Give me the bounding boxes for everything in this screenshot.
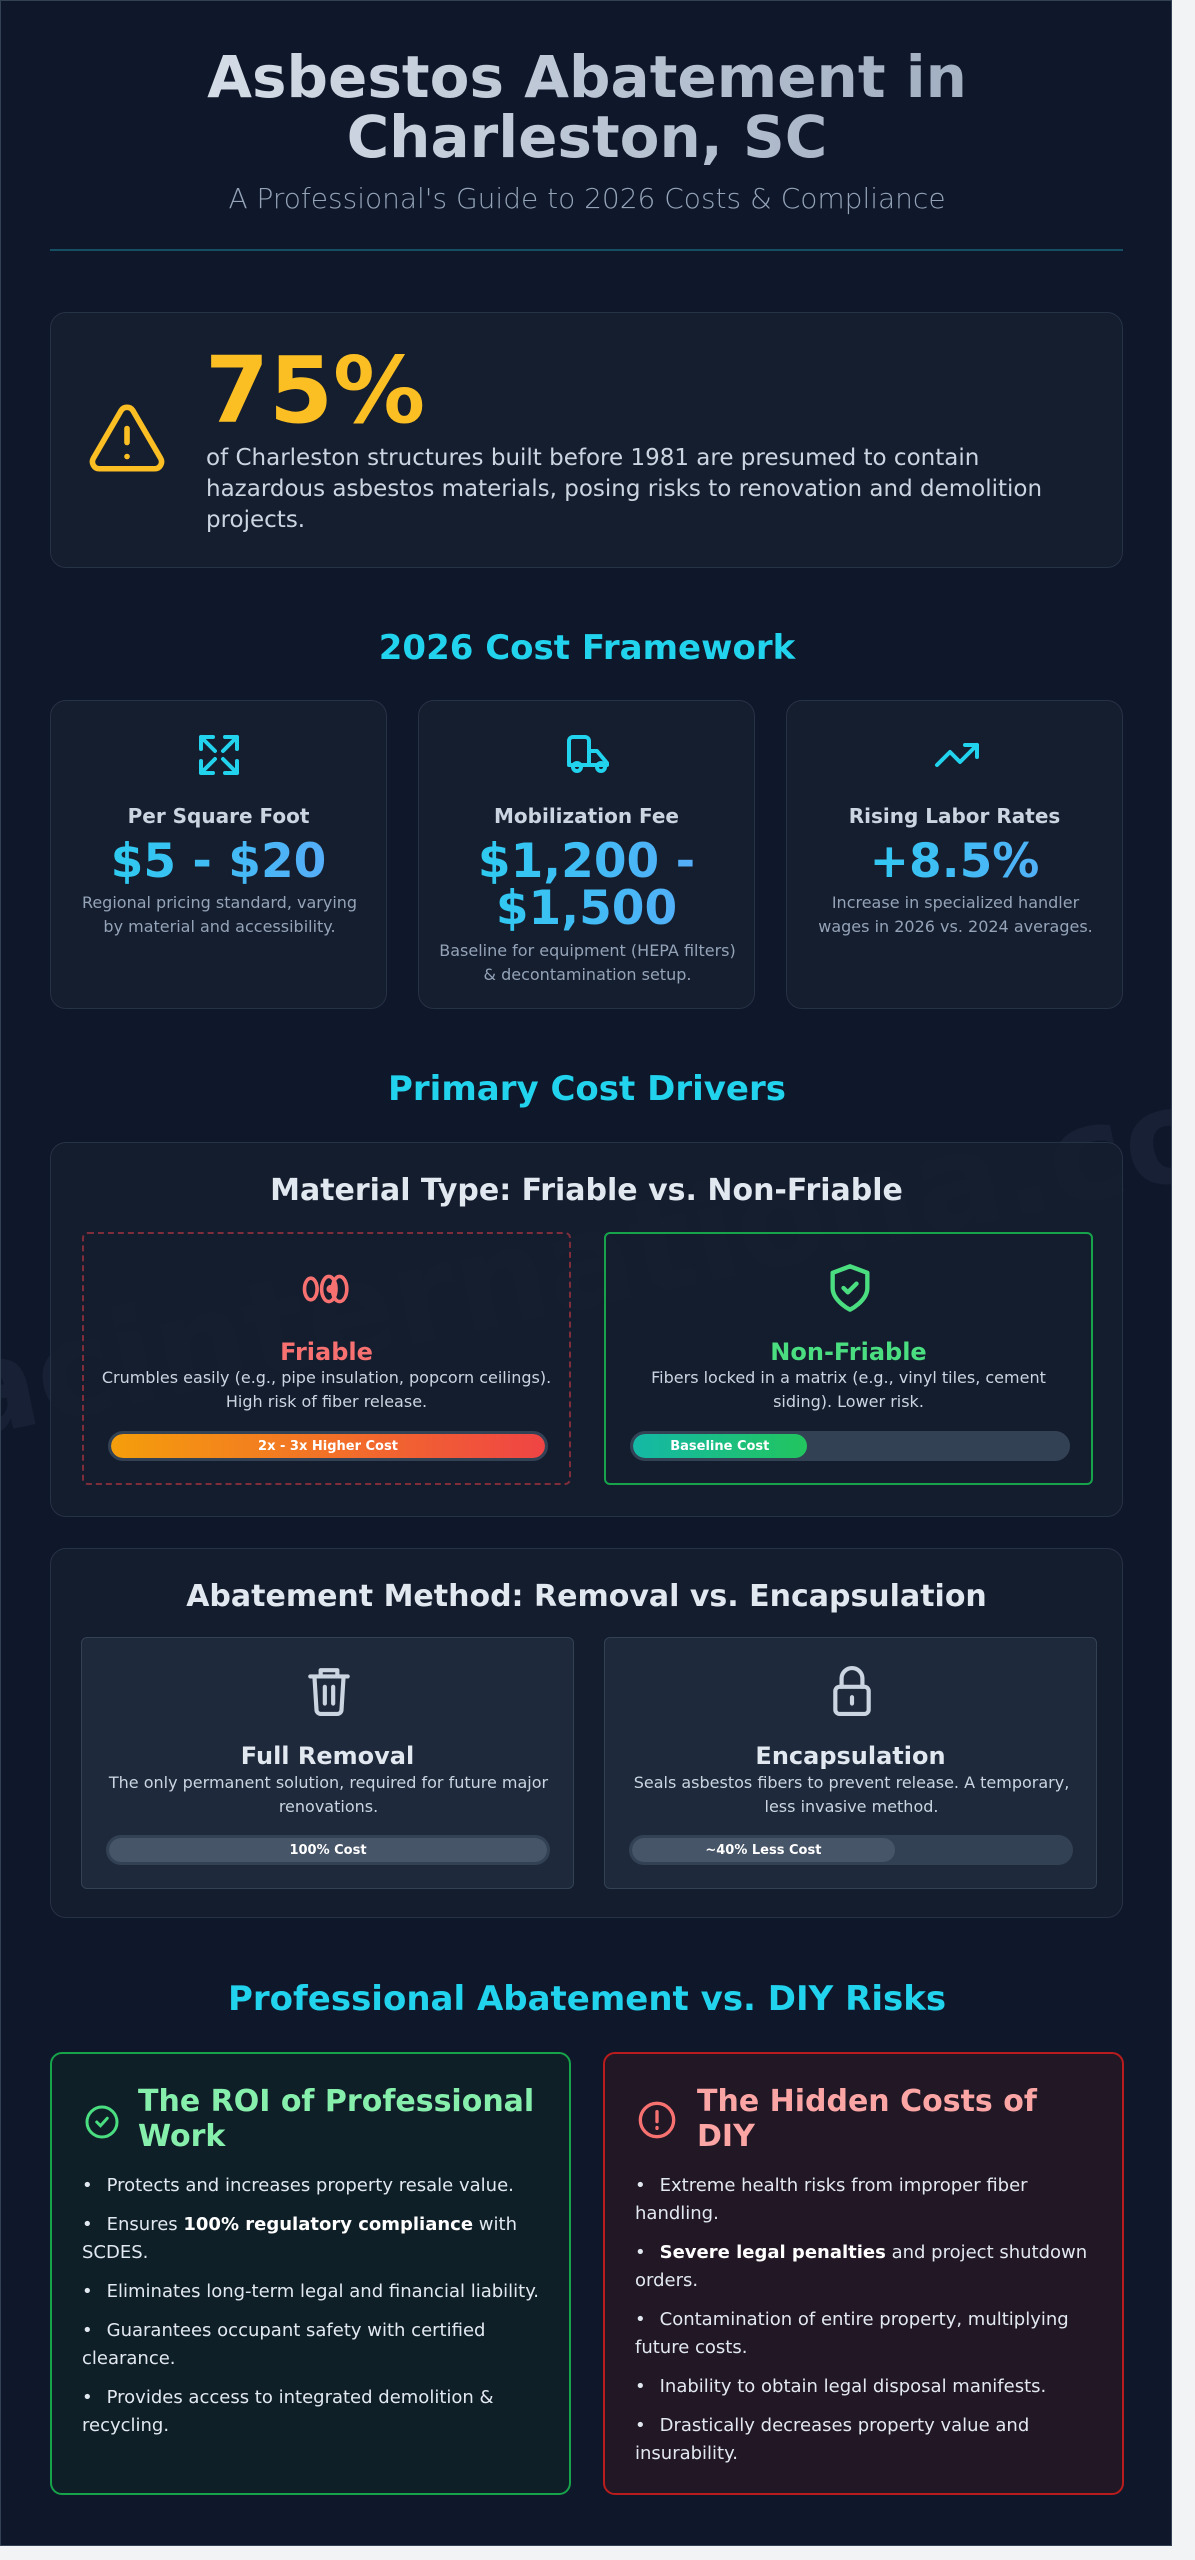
encapsulation box: ~40% Less Cost <box>705 1842 821 1858</box>
subtitle: A Professional's Guide to 2026 Costs & Compliance <box>228 182 946 215</box>
panel: ROI of professional work: Provides access to integrated demolition & recycling. <box>82 2387 494 2436</box>
full removal box: The only permanent solution, required for future major renovations. <box>109 1773 548 1816</box>
card: mobilization fee <box>418 700 755 1009</box>
panel: hidden costs of DIY <box>603 2052 1124 2495</box>
card: per square foot: Regional pricing standard, varying by material and accessibility. <box>82 893 357 936</box>
friable box: Crumbles easily (e.g., pipe insulation, popcorn ceilings). High risk of fiber release. <box>102 1368 551 1411</box>
panel: hidden costs of DIY: Contamination of entire property, multiplying future costs. <box>635 2309 1069 2358</box>
encapsulation box: Encapsulation <box>755 1742 946 1770</box>
title: Asbestos Abatement in <box>207 43 967 111</box>
stat card <box>50 312 1123 568</box>
card: rising labor rates: Increase in specialized handler wages in 2026 vs. 2024 averages. <box>818 893 1093 936</box>
heading: Primary Cost Drivers: Primary Cost Drivers <box>388 1069 786 1109</box>
panel: hidden costs of DIY: Inability to obtain legal disposal manifests. <box>660 2376 1046 2397</box>
panel: ROI of professional work: Protects and increases property resale value. <box>107 2175 514 2196</box>
panel: abatement method: Abatement Method: Removal vs. Encapsulation <box>186 1579 987 1614</box>
non-friable box: Baseline Cost <box>670 1438 769 1454</box>
title: Charleston, SC <box>347 103 827 171</box>
card: per square foot: $5 - $20 <box>111 834 326 889</box>
friable box: Friable <box>280 1338 373 1366</box>
panel: hidden costs of DIY: Extreme health risks from improper fiber handling. <box>635 2175 1028 2224</box>
full removal box: Full Removal <box>241 1742 414 1770</box>
panel: ROI of professional work: The ROI of Professional Work <box>138 2084 534 2154</box>
panel: hidden costs of DIY: Drastically decreases property value and insurability. <box>635 2415 1029 2464</box>
card: rising labor rates: Rising Labor Rates <box>849 804 1060 828</box>
friable box <box>82 1232 571 1485</box>
panel: hidden costs of DIY: Severe legal penalties and project shutdown orders. <box>635 2242 1087 2291</box>
non-friable box <box>604 1232 1093 1485</box>
card: rising labor rates: +8.5% <box>870 834 1039 889</box>
stat number: 75% <box>205 337 425 444</box>
card: per square foot <box>50 700 387 1009</box>
heading: Professional vs DIY: Professional Abatement vs. DIY Risks <box>228 1979 946 2019</box>
encapsulation box: Seals asbestos fibers to prevent release. A temporary, less invasive method. <box>634 1773 1069 1816</box>
panel: material type: Material Type: Friable vs. Non-Friable <box>270 1173 903 1208</box>
panel: ROI of professional work: Guarantees occupant safety with certified clearance. <box>82 2320 485 2369</box>
card: mobilization fee: Baseline for equipment (HEPA filters) & decontamination setup. <box>439 941 736 984</box>
card: mobilization fee: $1,200 - <box>478 834 695 889</box>
panel: ROI of professional work: Ensures 100% regulatory compliance with SCDES. <box>82 2214 517 2263</box>
card: rising labor rates <box>786 700 1123 1009</box>
title <box>1 47 1173 167</box>
card: mobilization fee: Mobilization Fee <box>494 804 679 828</box>
panel: hidden costs of DIY: The Hidden Costs of DIY <box>697 2084 1037 2154</box>
icon: warning <box>90 404 164 472</box>
non-friable box: Fibers locked in a matrix (e.g., vinyl tiles, cement siding). Lower risk. <box>651 1368 1046 1411</box>
full removal box: 100% Cost <box>289 1842 367 1858</box>
panel: ROI of professional work: Eliminates long-term legal and financial liability. <box>107 2281 539 2302</box>
non-friable box: Non-Friable <box>770 1338 927 1366</box>
panel: ROI of professional work <box>50 2052 571 2495</box>
stat description: of Charleston structures built before 1981 are presumed to contain hazardous asbestos materials, posing risks to renovation and demolition projects. <box>206 445 1042 533</box>
card: mobilization fee: $1,500 <box>496 881 677 936</box>
panel: material type <box>50 1142 1123 1517</box>
friable box: 2x - 3x Higher Cost <box>258 1438 398 1454</box>
full removal box <box>81 1637 574 1889</box>
heading: 2026 Cost Framework: 2026 Cost Framework <box>379 628 795 668</box>
card: per square foot: Per Square Foot <box>128 804 309 828</box>
panel: abatement method <box>50 1548 1123 1918</box>
encapsulation box <box>604 1637 1097 1889</box>
